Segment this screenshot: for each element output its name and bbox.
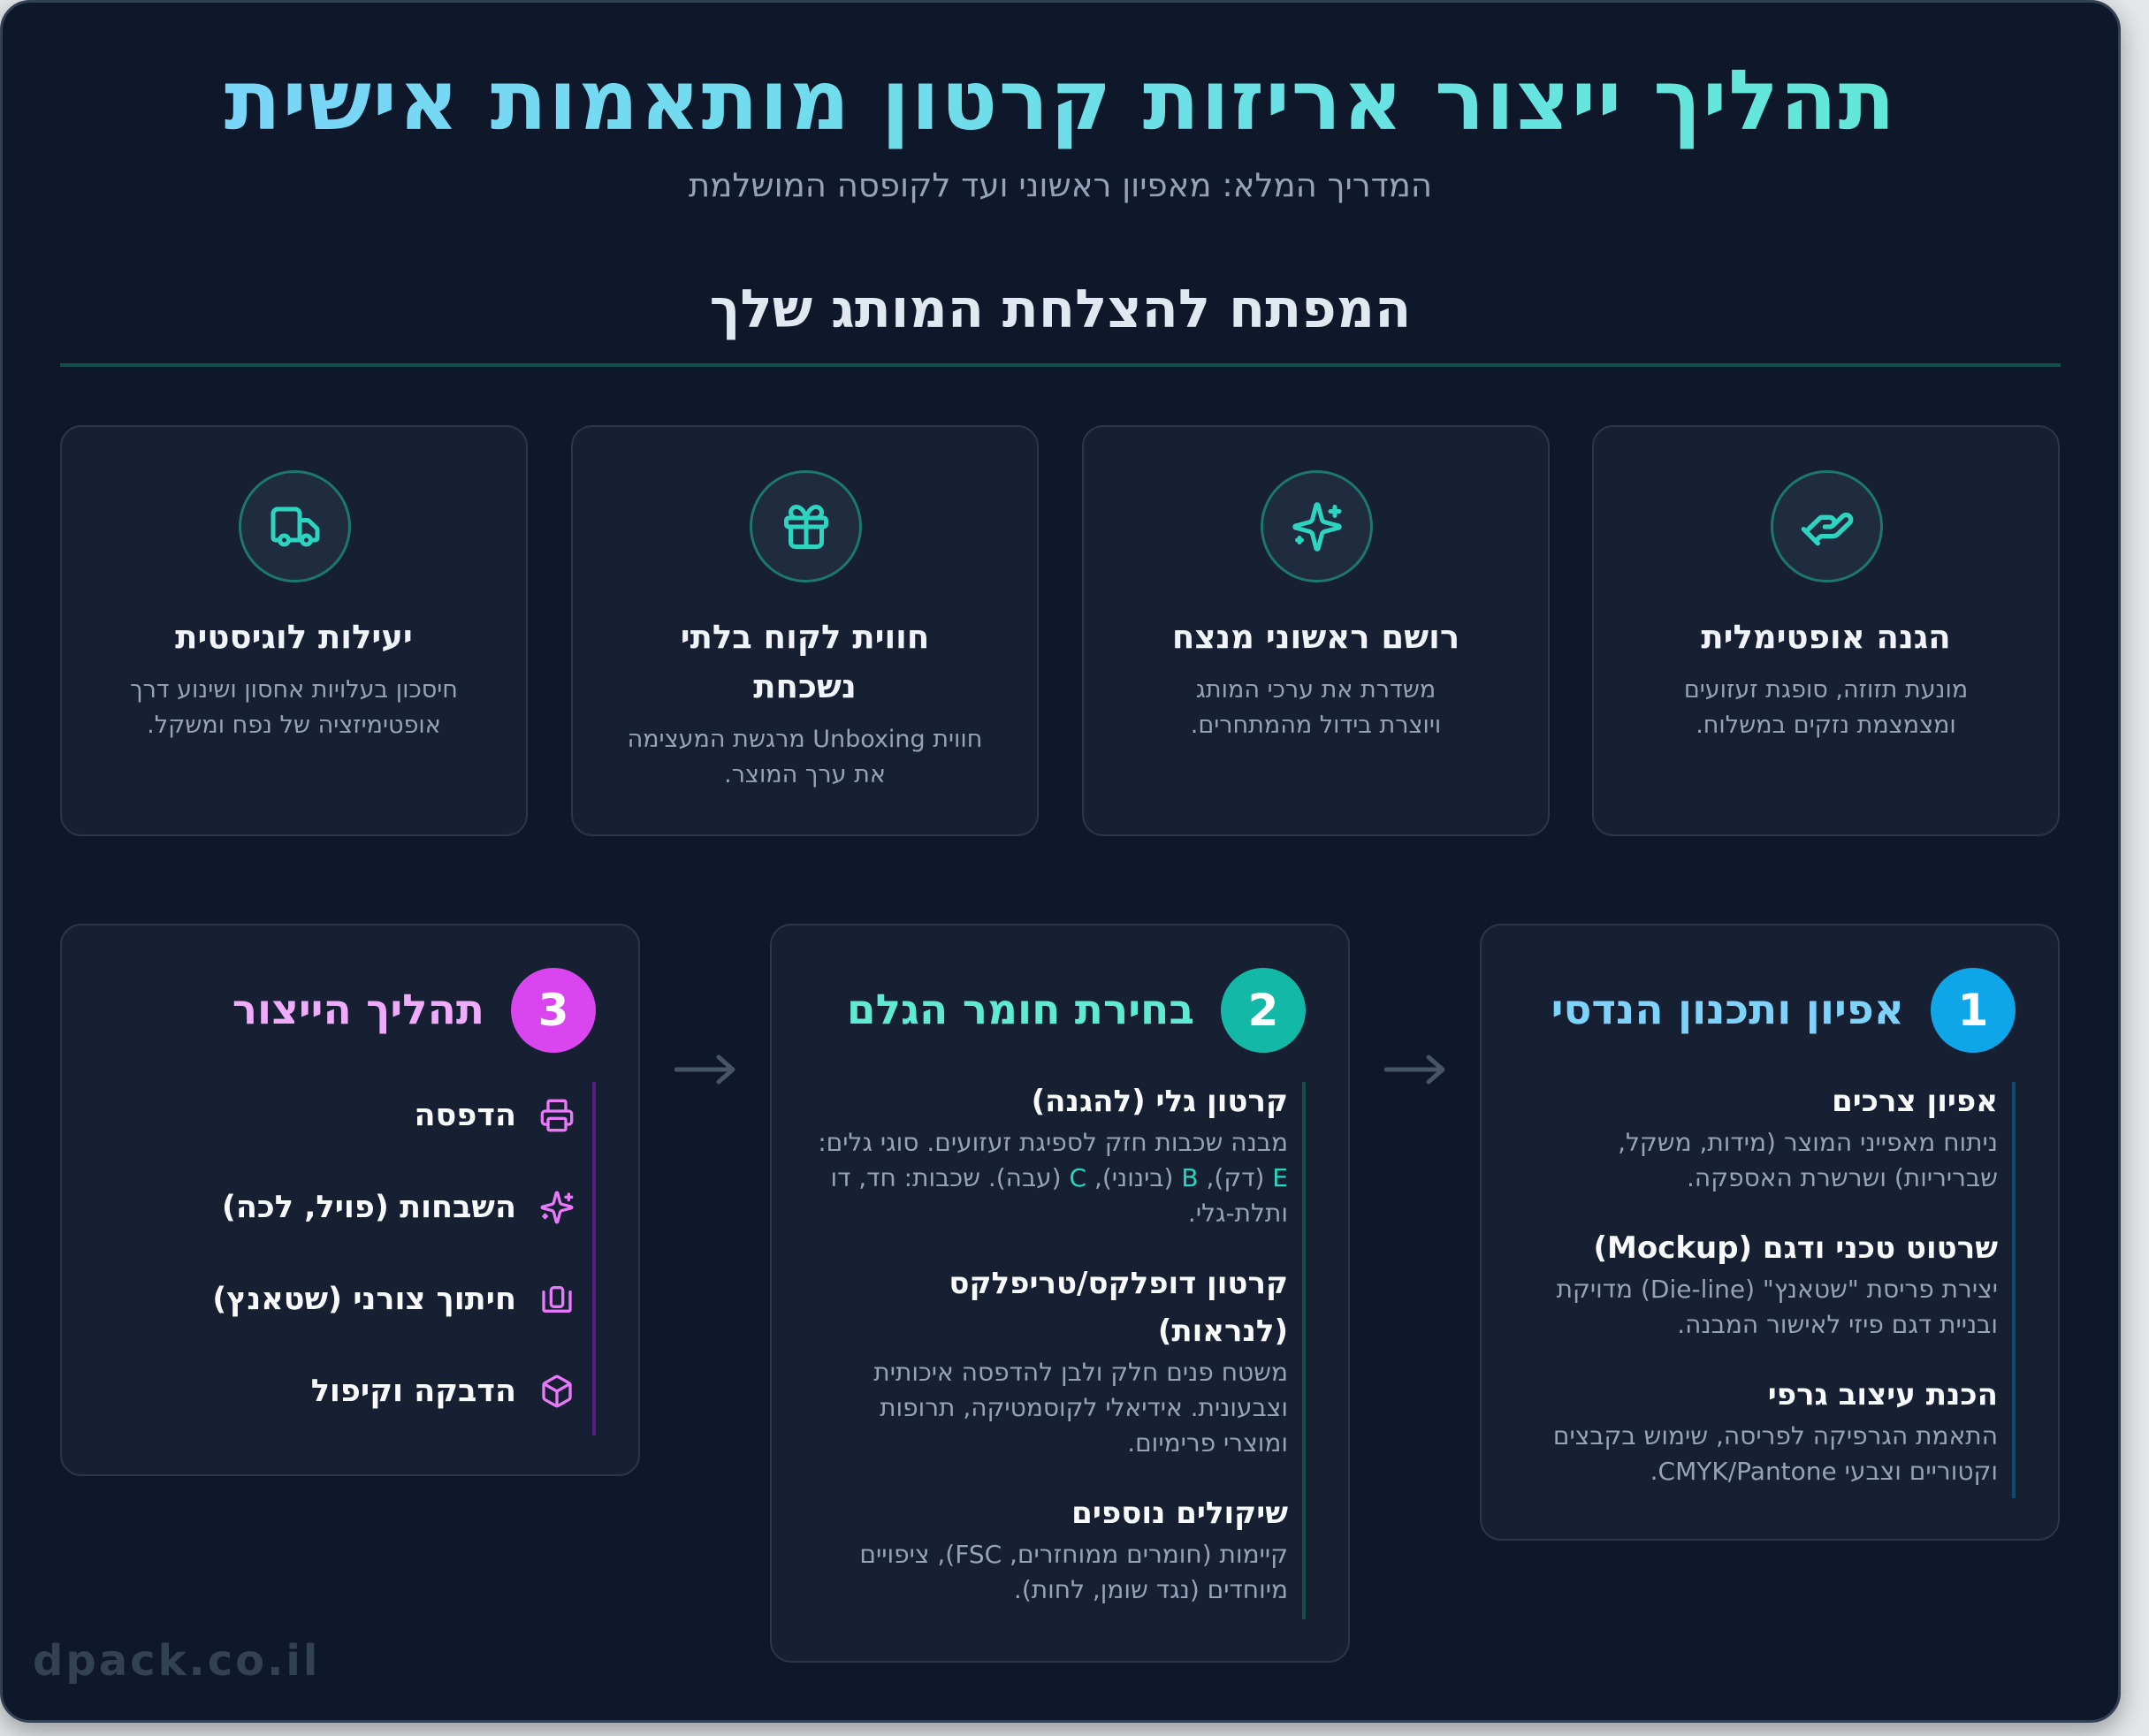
arrow [1384, 1055, 1444, 1084]
card title: רושם ראשוני מנצח [1172, 618, 1459, 656]
step items: אפיון צרכים [1832, 1084, 1998, 1119]
card title: הגנה אופטימלית [1701, 618, 1951, 656]
subtitle: המדריך המלא: מאפיון ראשוני ועד לקופסה המושלמת [689, 166, 1432, 204]
panel: step 3 [60, 924, 640, 1476]
card text: חווית Unboxing מרגשת המעצימה את ערך המוצר. [628, 726, 982, 788]
step items: משטח פנים חלק ולבן להדפסה איכותית וצבעונית. אידיאלי לקוסמטיקה, תרופות ומוצרי פרימיום. [873, 1358, 1288, 1458]
step title: תהליך הייצור [232, 986, 484, 1034]
step title: אפיון ותכנון הנדסי [1551, 986, 1904, 1034]
icon: truck [239, 470, 351, 582]
step number [1221, 968, 1306, 1053]
step items [1553, 1084, 1998, 1486]
step number: 2 [1248, 985, 1278, 1036]
item: finishing: השבחות (פויל, לכה) [222, 1190, 516, 1225]
step items: קרטון דופלקס/טריפלקס (לנראות) [949, 1266, 1288, 1349]
step title: בחירת חומר הגלם [847, 986, 1194, 1034]
card title: יעילות לוגיסטית [175, 618, 413, 656]
step items: קיימות (חומרים ממוחזרים, FSC), ציפויים מיוחדים (נגד שומן, לחות). [859, 1540, 1288, 1604]
step items: ניתוח מאפייני המוצר (מידות, משקל, שבריריות) ושרשרת האספקה. [1618, 1128, 1998, 1192]
arrow [674, 1055, 735, 1084]
step items: התאמת הגרפיקה לפריסה, שימוש בקבצים וקטוריים וצבעי CMYK/Pantone. [1553, 1421, 1998, 1486]
icon: shield hand [1771, 470, 1883, 582]
panel: optimal protection [1592, 425, 2060, 836]
icon: sparkles [1261, 470, 1373, 582]
card text: חיסכון בעלויות אחסון ושינוע דרך אופטימיזציה של נפח ומשקל. [130, 676, 458, 739]
step items: קרטון גלי (להגנה) [1032, 1084, 1288, 1119]
section heading: המפתח להצלחת המותג שלך [710, 278, 1411, 340]
panel: customer experience [571, 425, 1039, 836]
item: gluing: הדבקה וקיפול [311, 1374, 516, 1409]
item: printing: הדפסה [415, 1098, 516, 1133]
step items [212, 1098, 573, 1409]
card text: משדרת את ערכי המותג ויוצרת בידול מהמתחרים. [1191, 676, 1441, 739]
step items: שיקולים נוספים [1071, 1496, 1288, 1531]
card text: מונעת תזוזה, סופגת זעזועים ומצמצמת נזקים במשלוח. [1684, 676, 1968, 739]
panel: step 1 [1480, 924, 2060, 1541]
step items: מבנה שכבות חזק לספיגת זעזועים. סוגי גלים: E (דק), B (בינוני), C (עבה). שכבות: חד, דו ותלת-גלי. [818, 1128, 1288, 1228]
panel: logistics [60, 425, 528, 836]
step number: 1 [1958, 985, 1988, 1036]
item: printing [415, 1098, 573, 1133]
panel: step 2 [770, 924, 1350, 1663]
card title: חווית לקוח בלתי נשכחת [681, 618, 929, 705]
step number: 3 [538, 985, 568, 1036]
step items: יצירת פריסת "שטאנץ" (Die-line) מדויקת ובניית דגם פיזי לאישור המבנה. [1557, 1275, 1998, 1339]
step items: הכנת עיצוב גרפי [1768, 1377, 1998, 1412]
item: die cutting: חיתוך צורני (שטאנץ) [212, 1282, 516, 1317]
step items: שרטוט טכני ודגם (Mockup) [1593, 1230, 1998, 1266]
title: תהליך ייצור אריזות קרטון מותאמות אישית [225, 53, 1896, 149]
step items [818, 1084, 1288, 1604]
panel: first impression [1082, 425, 1550, 836]
step number [1931, 968, 2016, 1053]
icon: gift [750, 470, 862, 582]
watermark: dpack.co.il [33, 1636, 320, 1686]
step number [511, 968, 596, 1053]
